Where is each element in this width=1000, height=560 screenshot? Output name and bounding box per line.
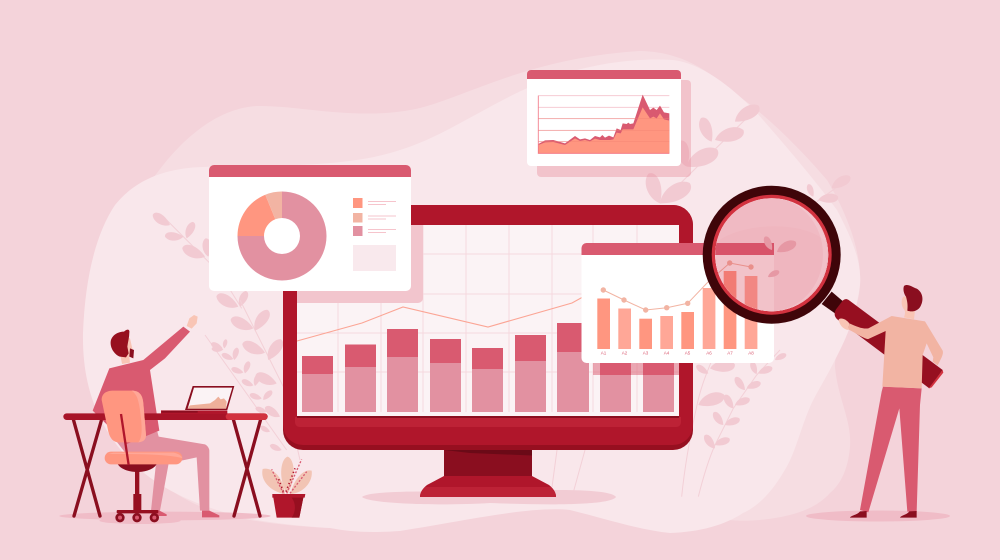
bar labels: A8 <box>748 350 754 356</box>
screen grid <box>297 225 679 412</box>
panel: pie chart <box>209 165 411 291</box>
desk and seated man <box>59 315 312 524</box>
monitor <box>283 205 693 497</box>
bar labels: A7 <box>727 350 733 356</box>
bar panel header <box>582 243 774 255</box>
screen bar chart <box>302 323 674 412</box>
hand <box>187 315 198 329</box>
shoes <box>850 511 917 518</box>
floor shadows <box>59 512 271 520</box>
magnifier handle <box>822 292 943 388</box>
torso and arm <box>93 327 190 444</box>
pot <box>272 494 305 518</box>
desk legs <box>73 419 261 516</box>
bar labels: A4 <box>664 350 670 356</box>
trend line <box>601 260 754 313</box>
panel: area chart <box>527 70 681 166</box>
background blob: inner <box>83 60 860 533</box>
right man with magnifier <box>822 285 943 518</box>
pants <box>117 432 209 511</box>
plant stems: lower centre <box>552 450 585 497</box>
note box <box>353 245 396 271</box>
right panel shadow <box>593 363 679 375</box>
plant: lower right <box>682 350 787 497</box>
lens content <box>715 198 828 312</box>
plant: left upper <box>151 210 250 312</box>
right man shadow <box>806 510 950 522</box>
magnifying glass <box>702 186 841 324</box>
shoes <box>151 510 219 517</box>
monitor base <box>420 476 556 497</box>
monitor shadow <box>362 490 616 504</box>
pants <box>860 387 922 512</box>
bar labels: A2 <box>622 350 628 356</box>
bar labels <box>601 350 754 356</box>
panel: bar chart <box>582 243 774 363</box>
bars <box>597 271 757 349</box>
area panel header <box>527 70 681 79</box>
bar labels: A3 <box>643 350 649 356</box>
bar labels: A1 <box>601 350 607 356</box>
seat bowl <box>118 464 157 472</box>
screen line chart <box>297 293 590 341</box>
torso and arms <box>848 316 943 388</box>
chair <box>102 391 182 521</box>
monitor stand <box>444 448 532 477</box>
pie panel header <box>209 165 411 177</box>
chair back <box>102 391 146 442</box>
wheels <box>117 514 158 521</box>
neck and head <box>902 295 915 319</box>
donut chart <box>237 191 326 280</box>
plant sprigs <box>272 459 307 493</box>
hair <box>903 285 922 311</box>
plant: top right <box>643 101 762 209</box>
top panel shadow <box>537 80 691 177</box>
background blob: outer <box>113 51 860 528</box>
pie panel shadow <box>297 225 423 303</box>
neck and face <box>121 337 133 364</box>
laptop <box>161 386 234 414</box>
bar labels: A5 <box>685 350 691 356</box>
plant: upper right small <box>805 172 853 204</box>
chair base and post <box>133 470 141 510</box>
area chart <box>538 95 669 153</box>
desk top <box>63 413 268 420</box>
chair rod <box>121 414 129 465</box>
plant leaves <box>262 457 312 494</box>
chair seat <box>105 452 182 464</box>
bar labels: A6 <box>706 350 712 356</box>
hair <box>111 330 129 357</box>
monitor frame <box>283 205 693 450</box>
legend <box>353 198 396 236</box>
monitor screen <box>297 225 679 416</box>
beard <box>129 348 134 358</box>
plant: left lower <box>205 300 300 460</box>
potted plant <box>262 457 312 518</box>
hand <box>839 319 849 330</box>
